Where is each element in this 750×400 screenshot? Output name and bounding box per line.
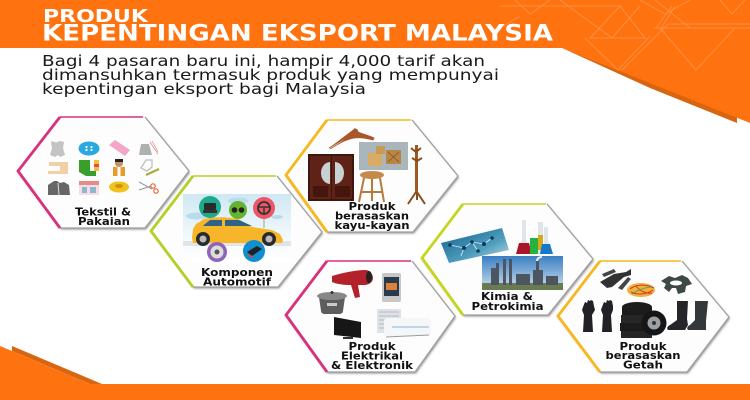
icons: textile grid [48, 140, 159, 195]
label: kayu-kayan: Produk [348, 201, 397, 213]
title: KEPENTINGAN EKSPORT MALAYSIA [42, 22, 553, 46]
label: automotif: Automotif [203, 276, 271, 288]
panel: automotif [150, 176, 322, 288]
title: PRODUK [43, 6, 149, 27]
illustration: electrical goods [317, 270, 431, 339]
intro text: kepentingan eksport bagi Malaysia [42, 81, 366, 98]
label: automotif: Komponen [201, 267, 273, 279]
panel: getah [557, 261, 729, 372]
panel: kimia [421, 204, 593, 315]
illustration: wood products [308, 129, 425, 204]
footer band [0, 346, 750, 400]
label: kayu-kayan: berasaskan [335, 210, 409, 222]
label: kimia: Petrokimia [472, 301, 544, 313]
illustration: car with parts [183, 194, 291, 262]
illustration: rubber goods [582, 269, 708, 338]
label: getah: Getah [623, 360, 663, 372]
label: tekstil: Tekstil & [75, 206, 131, 218]
header banner [0, 0, 750, 123]
intro text [42, 53, 499, 98]
label: tekstil: Pakaian [78, 216, 130, 228]
title [42, 6, 553, 46]
illustration: chemistry [441, 220, 563, 290]
intro text: dimansuhkan termasuk produk yang mempunyai [42, 67, 499, 84]
label: elektrikal: Produk [348, 341, 397, 353]
label: kayu-kayan [334, 201, 410, 232]
panel: tekstil [17, 117, 189, 228]
label: elektrikal: Elektrikal [341, 350, 403, 362]
label: getah: Produk [620, 341, 668, 353]
panel: elektrikal [285, 261, 455, 372]
label: kimia [472, 291, 544, 313]
label: kayu-kayan: kayu-kayan [334, 220, 410, 232]
label: elektrikal [331, 341, 414, 372]
label: getah: berasaskan [606, 350, 680, 362]
label: elektrikal: & Elektronik [331, 360, 414, 372]
label: tekstil [75, 206, 131, 228]
label: kimia: Kimia & [481, 291, 533, 303]
panel: kayu-kayan [285, 120, 458, 232]
intro text: Bagi 4 pasaran baru ini, hampir 4,000 tarif akan [42, 53, 485, 70]
label: automotif [201, 267, 273, 288]
label: getah [606, 341, 680, 372]
